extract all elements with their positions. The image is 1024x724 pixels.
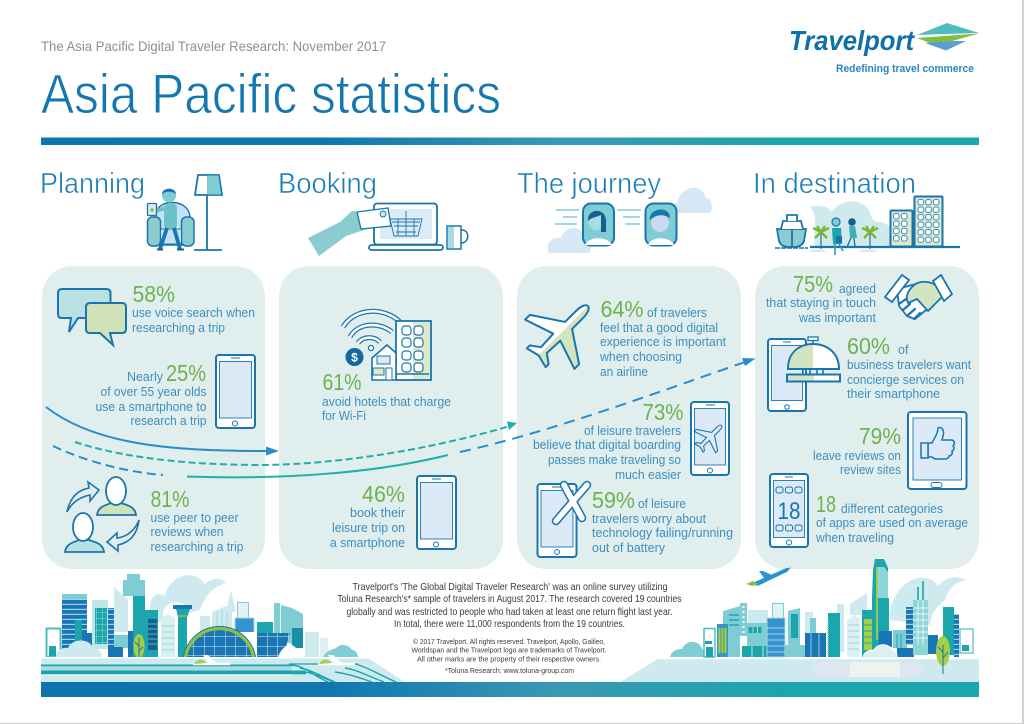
icon: phone with concierge bell — [768, 337, 840, 411]
stat: 60% concierge services: business travelers want — [847, 358, 971, 372]
copyright notice: *Toluna Research: www.toluna-group.com — [445, 666, 574, 675]
stat: 46% book on smartphone: leisure trip on — [332, 521, 405, 535]
heading: The journey: The journey — [517, 168, 661, 200]
stat: 81% peer reviews: use peer to peer — [150, 511, 238, 525]
icon: person in armchair with lamp — [148, 175, 222, 250]
stat: 73% digital boarding passes: of leisure travelers — [584, 424, 681, 438]
icon: chat bubbles — [58, 289, 126, 345]
header subtitle: The Asia Pacific Digital Traveler Research: November 2017 — [41, 39, 386, 54]
header divider bar — [41, 138, 979, 145]
stat: 64% digital experience: 64% — [600, 296, 644, 322]
copyright notice: Worldspan and the Travelport logo are trademarks of Travelport. — [412, 646, 606, 654]
icon: phone with app grid and 18 — [770, 474, 808, 547]
icon: travelers at plane windows with clouds — [548, 188, 712, 253]
stat: 59% worry about battery: 59% — [592, 487, 635, 513]
methodology text: globally and was restricted to people who had taken at least one return flight last year. — [346, 607, 672, 618]
stat: 46% book on smartphone: 46% — [362, 481, 405, 507]
icon: destination scene with ship, palms, women and hotels — [775, 196, 960, 255]
stat: 81% peer reviews — [150, 486, 244, 554]
stat: 73% digital boarding passes: believe that digital boarding — [533, 438, 681, 452]
stat: 64% digital experience: experience is important — [600, 335, 726, 349]
panel: booking — [279, 266, 503, 569]
stat: 64% digital experience: when choosing — [599, 350, 682, 364]
icon: phone with app grid and 18: 18 — [778, 498, 800, 525]
stat: 46% book on smartphone: a smartphone — [330, 536, 405, 550]
copyright notice — [412, 637, 606, 675]
stat: 81% peer reviews: 81% — [150, 486, 190, 512]
stat: 59% worry about battery: travelers worry about — [592, 512, 706, 526]
stat: 79% leave reviews: leave reviews on — [813, 449, 901, 463]
stat: 60% concierge services: concierge services on — [847, 373, 964, 387]
stat: 75% staying in touch: that staying in touch — [766, 296, 876, 310]
logo: Travelport: Redefining travel commerce — [836, 63, 974, 75]
stat: 79% leave reviews — [813, 423, 901, 477]
stat: 18 categories of apps: when traveling — [815, 531, 894, 545]
stat: nearly 25% smartphone: of over 55 year olds — [100, 385, 206, 399]
stat: 18 categories of apps: of apps are used on average — [816, 516, 968, 530]
icon: smartphone — [216, 355, 255, 428]
stat: 59% worry about battery — [592, 487, 733, 555]
stat: 75% staying in touch: was important — [798, 311, 876, 325]
stat: 18 categories of apps: 18 — [816, 491, 836, 517]
stat: 64% digital experience — [599, 296, 726, 379]
stat: nearly 25% smartphone: research a trip — [130, 414, 206, 428]
stat: 61% avoid hotels: avoid hotels that charge — [322, 395, 451, 409]
stat: 46% book on smartphone: book their — [350, 506, 405, 520]
logo: Travelport: Travelport — [789, 25, 916, 56]
copyright notice: © 2017 Travelport. All rights reserved. Travelport, Apollo, Galileo, — [413, 637, 605, 646]
stat: 75% staying in touch: agreed — [839, 282, 876, 296]
stat: 61% avoid hotels: 61% — [322, 369, 362, 395]
stat: 73% digital boarding passes: passes make traveling so — [548, 453, 681, 467]
panel: the journey — [517, 266, 741, 569]
stat: 81% peer reviews: researching a trip — [150, 540, 244, 554]
icon: departing plane — [746, 568, 789, 586]
stat: 79% leave reviews: review sites — [840, 463, 901, 477]
methodology text — [338, 582, 682, 630]
stat: 58% voice search — [132, 281, 255, 335]
stat: 59% worry about battery: out of battery — [592, 541, 666, 555]
icon: hotel wifi: $ — [351, 350, 358, 364]
stat: 64% digital experience: an airline — [600, 365, 648, 379]
stat: 60% concierge services — [847, 333, 971, 401]
stat: nearly 25% smartphone: use a smartphone to — [96, 400, 206, 414]
icon: tablet with thumbs up — [908, 412, 966, 489]
methodology text: Toluna Research's* sample of travelers in August 2017. The research covered 19 countries — [338, 594, 682, 605]
stat: 79% leave reviews: 79% — [859, 423, 901, 449]
stat: 61% avoid hotels: for Wi-Fi — [322, 409, 366, 423]
stat: 60% concierge services: of — [898, 343, 909, 357]
stat: 75% staying in touch: 75% — [793, 271, 833, 297]
copyright notice: All other marks are the property of their respective owners. — [417, 654, 601, 664]
stat: 73% digital boarding passes: 73% — [642, 399, 684, 425]
icon: handshake — [885, 275, 952, 319]
panel: planning — [42, 266, 265, 569]
stat: 60% concierge services: 60% — [847, 333, 890, 359]
icon: smartphone with failure cross — [538, 484, 587, 557]
stat: 58% voice search: use voice search when — [132, 306, 255, 320]
icon: peer to peer people — [65, 477, 139, 552]
stat: nearly 25% smartphone: 25% — [166, 360, 206, 386]
stat: 64% digital experience: of travelers — [647, 306, 707, 320]
stat: 18 categories of apps: different categories — [841, 502, 943, 516]
stat: 73% digital boarding passes — [533, 399, 684, 482]
stat: 60% concierge services: their smartphone — [847, 387, 940, 401]
stat: 59% worry about battery: of leisure — [638, 497, 686, 511]
heading: Booking: Booking — [278, 168, 377, 200]
icon: smartphone with plane — [688, 402, 732, 475]
stat: 75% staying in touch — [766, 271, 876, 325]
heading: In destination: In destination — [753, 168, 916, 200]
arrows: journey paths — [46, 358, 756, 477]
right city skyline — [620, 559, 979, 682]
stat: nearly 25% smartphone — [96, 360, 206, 428]
stat: 61% avoid hotels — [322, 369, 451, 423]
stat: 58% voice search: researching a trip — [132, 321, 225, 335]
icon: smartphone — [417, 476, 456, 549]
stat: 58% voice search: 58% — [132, 281, 175, 307]
heading: Planning: Planning — [40, 168, 145, 200]
methodology text: Travelport's 'The Global Digital Traveler Research' was an online survey utilizing — [352, 582, 668, 593]
panel: in destination — [755, 266, 979, 569]
stat: 46% book on smartphone — [330, 481, 405, 550]
title: Asia Pacific statistics — [41, 63, 501, 125]
stat: 81% peer reviews: reviews when — [150, 525, 224, 539]
footer bar — [41, 682, 979, 697]
icon: online booking laptop and card — [308, 204, 468, 256]
stat: 64% digital experience: feel that a good digital — [600, 321, 718, 335]
stat: 18 categories of apps — [815, 491, 968, 545]
icon: airplane — [524, 304, 590, 370]
methodology text: In total, there were 11,000 respondents from the 19 countries. — [394, 619, 625, 630]
icon: hotel wifi — [343, 311, 431, 380]
logo: Travelport — [789, 23, 979, 75]
stat: nearly 25% smartphone: Nearly — [127, 370, 164, 384]
left city skyline with airport — [41, 574, 405, 682]
stat: 73% digital boarding passes: much easier — [615, 468, 681, 482]
stat: 59% worry about battery: technology failing/running — [592, 526, 733, 540]
